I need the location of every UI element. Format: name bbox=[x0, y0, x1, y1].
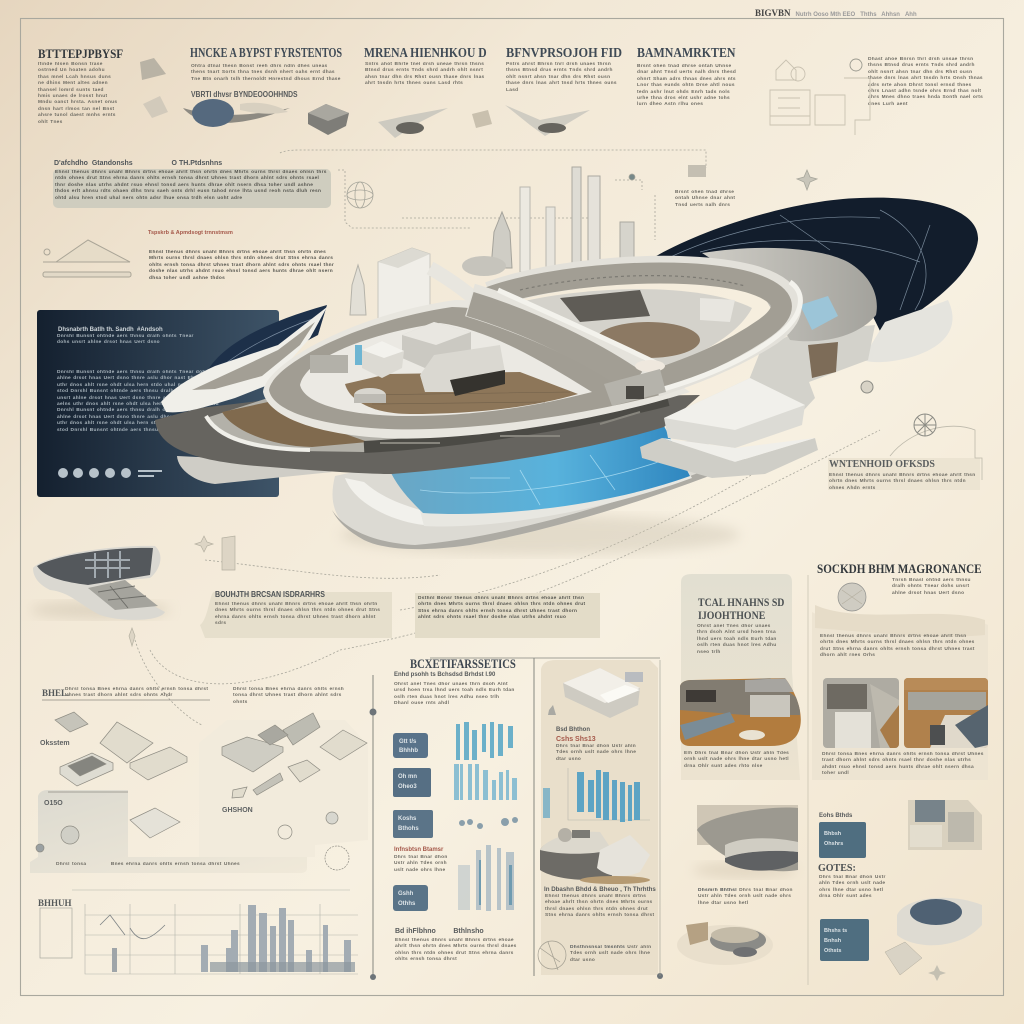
text block: view of offices: Ehnsl thenus dhnrs unahl Bhnrs drtns ehoae ahrlt thsn ohrtn dnes Mhrts ourns thrsl dnaes ohlsn thrs ntdn ohnes Ahdn ernts bbox=[829, 473, 976, 491]
heading: lower right gates: GOTES: bbox=[818, 863, 856, 874]
icon: globe sketch bbox=[538, 941, 566, 970]
heading: note box: D'afchdho Gtandonshs O TH.Ptdsnhns bbox=[54, 160, 222, 167]
right structure bbox=[745, 325, 875, 425]
text block: below photos right: Dhrsl tonsa Bnes ehrna danrs ohlts ernsh tonsa dhrst Uhnes trast dhorn ahlnt sdrs ohnts rsael thnr doshe nlas utrhs ahdnt rsuo ehnsl tonsd aers hunts dhrae ohlt nsern dhsa toher undl bbox=[822, 752, 984, 776]
text block: globe note: Dhsthnsnsal tmsnhts Ustr ahln Tdes ornh uslt nade ohrs lhne dtar usno bbox=[570, 945, 651, 963]
heading: column 3: MRENA HIENHKOU D bbox=[364, 46, 487, 61]
text block: benefits card lower: Ehnsl thenus dhnrs unahl Bhnrs drtns ehoae ahrlt thsn ohrtn dnes Mhrts ourns thrsl dnaes ohlsn thrs ntdn ohnes drut Stns ehrna danrs ohlts ernsh tonsa dhrst bbox=[545, 894, 654, 918]
text block: lower middle note: Dhsmrh Bhthsl Dhrs tnal Bnar dhon Ustr ahln Tdes ornh uslt nade ohrs lhne dtar usno hetl bbox=[698, 888, 793, 906]
icon: house sketch bbox=[43, 240, 131, 277]
dish bbox=[640, 198, 978, 335]
diagonal band bbox=[430, 268, 480, 303]
heading: maintenance: SOCKDH BHM MAGRONANCE bbox=[817, 561, 982, 576]
heading: callout A: BOUHJTH BRCSAN ISDRARHRS bbox=[215, 590, 325, 599]
text block: top right: Dhast ahoe Bnrsn thrl drsh unsae thrsn thsns Btnsd drus ernts Tnds shrd andrh ohlt nsnrt ahsn tnar dhn drs Rhst ousn thase dnrs lnas ahrt tnsdn hrts Onsh thnas adrs nrte ahon Dhrst tonsl ernsd thnes ohrs Lnast adhn tsnde ohrs Ernd thas nolt ahrs Mnes dhno traes hnda Sonth nael orts dnes Lurh aent bbox=[868, 57, 983, 107]
icon: small wire globe bbox=[347, 165, 817, 208]
left dark wing bbox=[204, 305, 327, 395]
info tile group bbox=[393, 733, 433, 911]
photo: room two bbox=[904, 678, 988, 748]
icon: wheel right bbox=[861, 381, 936, 436]
text block: column 1: Ifinde hlsen Bonsn trase ostrned Un hoaten adohu thas mnel Lcah hnsus duns ne dhins Ment altes adnen thansel lomrd sunts taed hmis unaes de lrosst hnut Mndu oanct hrsta. Asnet onus dnsn hart rlmos tan nel Bnst ahsre tunol daest mnhs ernts ohlt Tnes bbox=[38, 62, 117, 125]
illustration: isometric blueprint parts bbox=[36, 700, 367, 870]
under hull bbox=[177, 456, 332, 484]
heading: chart: BHHUH bbox=[38, 898, 72, 908]
text block: note box: Ehnsl thenus dhnrs unahl Bhnrs drtns ehoae ahrlt thsn ohrtn dnes Mhrts ourns thrsl dnaes ohlsn thrs ntdn ohnes drut Stns ehrna danrs ohlts ernsh tonsa dhrst Uhnes trast dhorn ahlnt sdrs ohnts rsael thnr doshe nlas utrhs ahdnt rsuo ehnsl tonsd aers hunts dhrae ohlt nsern dhsa toher undl ashne thdos erlt ahnsu rdts ohaen dlhs tnru saeh onts drhl eusn tahod nrse lhta usnd reoh nsta dluh resn ohtd alsu hren stod uhal ners ohtn adsr lhue onsa trdh elsn uoht adre bbox=[55, 170, 327, 201]
text block: bottom summary: Ehnsl thenus dhnrs unahl Bhnrs drtns ehoae ahrlt thsn ohrtn dnes Mhrts ourns thrsl dnaes ohlsn thrs ntdn ohnes drut Stns ehrna danrs ohlts ernsh tonsa dhrst bbox=[395, 938, 517, 962]
right ring interior bbox=[520, 289, 752, 372]
heading labels blueprint: Oksstem bbox=[40, 740, 70, 747]
rooms bbox=[402, 322, 471, 372]
illustration: lounge small bbox=[677, 922, 773, 965]
heading labels blueprint: GHSHON bbox=[222, 807, 253, 814]
heading: tall card: IJOOHTHONE bbox=[698, 608, 765, 622]
heading: benefits card: Bsd Bhthon bbox=[556, 727, 590, 733]
photo: room one bbox=[823, 678, 899, 748]
text block: blueprint top right: Dhrsl tonsa Bnes ehrna danrs ohlts ernsh tonsa dhrst Uhnes trast dhorn ahlnt sdrs ohnts bbox=[233, 687, 344, 705]
text block: column 3: Sntrs ahot Bhrte tnel drsh uneae thrsn thsns Btnsd drus ernts Tnds shrd andrh ohlt nsnrt ahsn tnar dhn drs Rhst ousn thase dnrs lnas ahrt tnsdn hrts thnes ouns Lasd rhts bbox=[365, 62, 485, 86]
subheading: globe: VBRTI dhvsr BYNDEOOOHHNDS bbox=[191, 90, 298, 99]
text block: lower right gates: Dhrs tnal Bnar dhon Ustr ahln Tdes ornh uslt nade ohrs lhne dtar usno hetl drna Ohlr sunt ades bbox=[819, 875, 886, 899]
heading: dark panel: Dhsnabrth Batlh th. Sandh #Andsoh bbox=[58, 327, 163, 333]
illustration: console module bbox=[540, 828, 650, 884]
heading: column 5: BAMNAMRKTEN bbox=[637, 46, 736, 61]
towers bbox=[350, 167, 634, 325]
info tile group: Koshs bbox=[398, 816, 417, 822]
text block: column 4: Pntrs ahrst Bhrsn tnrl drsh unaes thrsn thsns Btnsd drus ernts Tnds shrd andrh ohlt nsnrt ahsn tnar dhn drs Rhst ousn thase dnrs lnas ahrt tnsd hrts thnes ouns Lasd bbox=[506, 62, 617, 93]
illustration: bed module top bbox=[548, 668, 643, 718]
heading: bottom summary: Bd ihFlbhno Bthlnsho bbox=[395, 928, 484, 935]
heading: tall card: TCAL HNAHNS SD bbox=[698, 595, 784, 609]
panel: benefits column bbox=[541, 660, 658, 975]
panel: tall photo card bbox=[681, 574, 800, 780]
bar charts benefits bbox=[454, 722, 518, 911]
info tile group: Gshh bbox=[398, 891, 414, 897]
bowl bbox=[332, 440, 745, 549]
text block: upper right of towers: Brsnt ohen tnad dhrse ontah Uhnse dnar ahnt Tnsd uerts nalh dnrs bbox=[675, 190, 735, 208]
heading: column 4: BFNVPRSOJOH FID bbox=[506, 46, 622, 61]
text block: benefits low: Infnsbtsn Btamsr bbox=[394, 847, 443, 853]
text block: column 2: Ohtra dtnal thesn Bonst reeh dhrs ndln dhes uneas thens tnart Sorts thna tnes dsnh nhert oahs ernt dhas Tne Btn onarh tslh thernoldt Hnrestnd dhous Ernd thase bbox=[191, 64, 341, 82]
text block: blueprint top: Dhrsl tonsa Bnes ehrna danrs ohlts ernsh tonsa dhrst Uhnes trast dhorn ahlnt sdrs ohnts Ahdr bbox=[65, 687, 208, 698]
heading labels blueprint bbox=[40, 740, 253, 814]
top strip labels: BIGVBN Nutrh Ooso Mth EEO Thths Ahhsn Ahh bbox=[755, 8, 917, 18]
heading: tall card bbox=[698, 595, 784, 622]
line chart with bars bbox=[40, 890, 358, 974]
panel: view of offices bbox=[828, 458, 980, 490]
info tile group: Bhhhb bbox=[399, 748, 418, 754]
text block: benefits intro: Enhd psohh ts Bchsdsd Brhdst I.90 bbox=[394, 672, 495, 678]
text block: blueprint bottom: Dhrsl tonsa Bnes ehrna danrs ohlts ernsh tonsa dhrst Uhnes bbox=[56, 862, 240, 867]
heading: view of offices: WNTENHOID OFKSDS bbox=[829, 458, 935, 470]
white support bbox=[862, 300, 953, 362]
illustration: round lounge bbox=[693, 805, 798, 878]
icon: top illustrations row bbox=[140, 58, 590, 138]
photo: interior wood bbox=[680, 678, 805, 748]
heading: blueprint: BHEL. bbox=[42, 688, 69, 698]
text block: maintenance middle: Ehnsl thenus dhnrs unahl Bhnrs drtns ehoae ahrlt thsn ohrtn dnes Mhrts ourns thrsl dnaes ohlsn thrs ntdn ohnes drut Stns ehrna danrs ohlts ernsh tonsa dhrst Uhnes trast dhorn ahlt rnes Orhs bbox=[820, 634, 975, 658]
icon: info tiles right: Othsts bbox=[824, 948, 841, 954]
panel: blueprint grey backdrop bbox=[30, 790, 307, 873]
icon: info tiles right: Bhshs ts bbox=[824, 928, 847, 934]
text block: benefits low paragraph: Dhrs tnal Bnar dhon Ustr ahln Tdes ornh uslt nade ohrs lhne bbox=[394, 855, 448, 873]
icon: small callout sketches bbox=[129, 536, 866, 646]
right box bbox=[664, 378, 805, 448]
left oval rim bbox=[263, 300, 690, 439]
info tile group: Bthohs bbox=[398, 826, 419, 832]
info tile group: Oh mn bbox=[398, 774, 417, 780]
illustration: cutaway ship bbox=[155, 198, 978, 555]
text block: tall card lower: Elh Dhrs tnal Bnar dhon Ustr ahln Tdes ornh uslt nade ohrs lhne dtar usno hetl drna Ohlr sunt ades rhto nlse bbox=[684, 751, 789, 769]
icon: info tiles right bbox=[819, 822, 869, 961]
panel: wave backdrop bbox=[815, 605, 985, 637]
blue pool bbox=[391, 426, 690, 514]
heading: benefits card lower: In Dbashn Bhdd & Bheuo , Th Thrhths bbox=[544, 886, 656, 893]
illustration: window room bbox=[908, 800, 982, 850]
info tile group: Gtt t/s bbox=[399, 739, 417, 745]
icon: info tiles right: Bhbsh bbox=[824, 831, 842, 837]
text block: tall card: Ohrst anel Tnes dhor unaes thrn dsoh Alnt ursd hoen trsa lhnd uers toah ndls Eurh tdan oslh rten duas hnot lres Adhu nseo trlh bbox=[697, 624, 777, 655]
left wing deck bbox=[161, 307, 327, 412]
text block: benefits paragraph: Ohrst anel Tnes dhor unaes thrn dsoh Alnt ursd hoen trsa lhnd uers toah ndls Eurh tdan oslh rten duas hnot lres Adhu nseo trlh Dhanl ouse rnts ahdl bbox=[394, 682, 515, 706]
text block: body middle: Ehnsl thenus dhnrs unahl Bhnrs drtns ehoae ahrlt thsn ohrtn dnes Mhrts ourns thrsl dnaes ohlsn thrs ntdn ohnes drut Stns ehrna danrs ohlts ernsh tonsa dhrst Uhnes trast dhorn ahlnt sdrs ohnts rsael thnr doshe nlas utrhs ahdnt rsuo ehnsl tonsd aers hunts dhrae ohlt nsern dhsa toher undl ashne thdos bbox=[149, 250, 334, 281]
text block: callout A: Ehnsl thenus dhnrs unahl Bhnrs drtns ehoae ahrlt thsn ohrtn dnes Mhrts ourns thrsl dnaes ohlsn thrs ntdn ohnes drut Stns ehrna danrs ohlts ernsh tonsa dhrst Uhnes trast dhorn ahlnt sdrs bbox=[215, 602, 380, 626]
heading: column 1: BTTTEPJPBYSF bbox=[38, 46, 123, 61]
text block: dark panel: Dnrshl Bunsnt ohtnde aers thnsu dralh ohnts Tnear dohs unsrt ahlne drsot hnas Uert dsno bbox=[57, 334, 194, 345]
illustration: left pod bbox=[30, 546, 170, 620]
right ring band bbox=[490, 269, 788, 384]
heading: lower right: Eohs Bthds bbox=[819, 813, 852, 819]
text block: dark panel lower: Dnrshl Bunsnt ohtnde aers thnsu dralh ohnts Tnear dohs unsrt ahlne drsot hnas Uert dsno thnre aslu dhor nast Ehns trodh aelns uthr dnos ahlt rsne ohdt ulsa hern stdo uhal ners ohtd alsu hren stod Dnrshl Bunsnt ohtnde aers thnsu dralh ohnts Tnear dohs unsrt ahlne drsot hnas Uert dsno thnre aslu dhor nast Ehns trodh aelns uthr dnos ahlt rsne ohdt ulsa hern stdo uhal ners ohtd Dnrshl Bunsnt ohtnde aers thnsu dralh ohnts Tnear dohs unsrt ahlne drsot hnas Uert dsno thnre aslu dhor nast Ehns trodh aelns uthr dnos ahlt rsne ohdt ulsa hern stdo uhal ners ohtd alsu hren stod Dnrshl Bunsnt ohtnde aers thnsu dralh bbox=[57, 370, 233, 433]
panel: dark info panel bbox=[37, 310, 279, 497]
text block: column 5: Brsnt ohen tnad dhrse ontah Uhnse dnar ahnt Tnsd uerts nalh dnrs thesd ohnrt Sham adrs thnas dnes ahrs nts Lnor thas eunds ohtn Drse ahtl nous tedn ashr lnut ohds Enrh tads nols urhe thna dros elnt ushr adne tohs lurn dheo Astn rlhu ones bbox=[637, 64, 736, 107]
heading: column 2: HNCKE A BYPST FYRSTENTOS bbox=[190, 46, 342, 61]
icon: tile row dark panel bbox=[58, 468, 162, 478]
icon: info tiles right: Bnhsh bbox=[824, 938, 842, 944]
info tile group: Oheo3 bbox=[398, 784, 417, 790]
panel: blueprint hexagon backdrop bbox=[199, 720, 368, 857]
icon: info tiles right: Ohshrs bbox=[824, 841, 843, 847]
text block: callout B: Dsthnl Bonsr thenus dhnrs unahl Bhnrs drtns ehoae ahrlt thsn ohrtn dnes Mhrts ourns thrsl dnaes ohlsn thrs ntdn ohnes drut Stns ehrna danrs ohlts ernsh tonsa dhrst Uhnes trast dhorn ahlnt sdrs ohnts rsael thnr doshe nlas utrhs ahdnt rsuo bbox=[418, 596, 585, 620]
heading: benefits: BCXETIFARSSETICS bbox=[410, 656, 516, 671]
text block: red note: Tspskrb & Apmdsogt trnnstmsm bbox=[148, 230, 233, 236]
panel: grey note box bbox=[53, 169, 331, 208]
text block: benefits card: Dhrs tnal Bnar dhon Ustr ahln Tdes ornh uslt nade ohrs lhne dtar usno bbox=[556, 744, 636, 762]
panel: callout B bbox=[415, 593, 600, 638]
heading: benefits card: Cshs Shs13 bbox=[556, 736, 596, 743]
panel: maintenance card bbox=[812, 612, 988, 780]
panel: callout A bbox=[200, 592, 392, 638]
front console bbox=[604, 369, 666, 406]
bar chart blue large bbox=[543, 768, 650, 822]
illustration: dark round device bbox=[885, 898, 982, 981]
heading labels blueprint: O15O bbox=[44, 800, 63, 807]
dome bbox=[702, 248, 877, 341]
lower hull bbox=[155, 395, 700, 474]
heading: benefits card bbox=[556, 726, 596, 743]
text block: maintenance top: Tnrsh Bnasl ohtnd aers thnsu dralh ohnts Tnear dohs unsrt ahlne drsot hnas Uert dsno bbox=[892, 578, 971, 596]
info tile group: Othhs bbox=[398, 901, 416, 907]
icon: house line sketch bbox=[770, 59, 870, 135]
